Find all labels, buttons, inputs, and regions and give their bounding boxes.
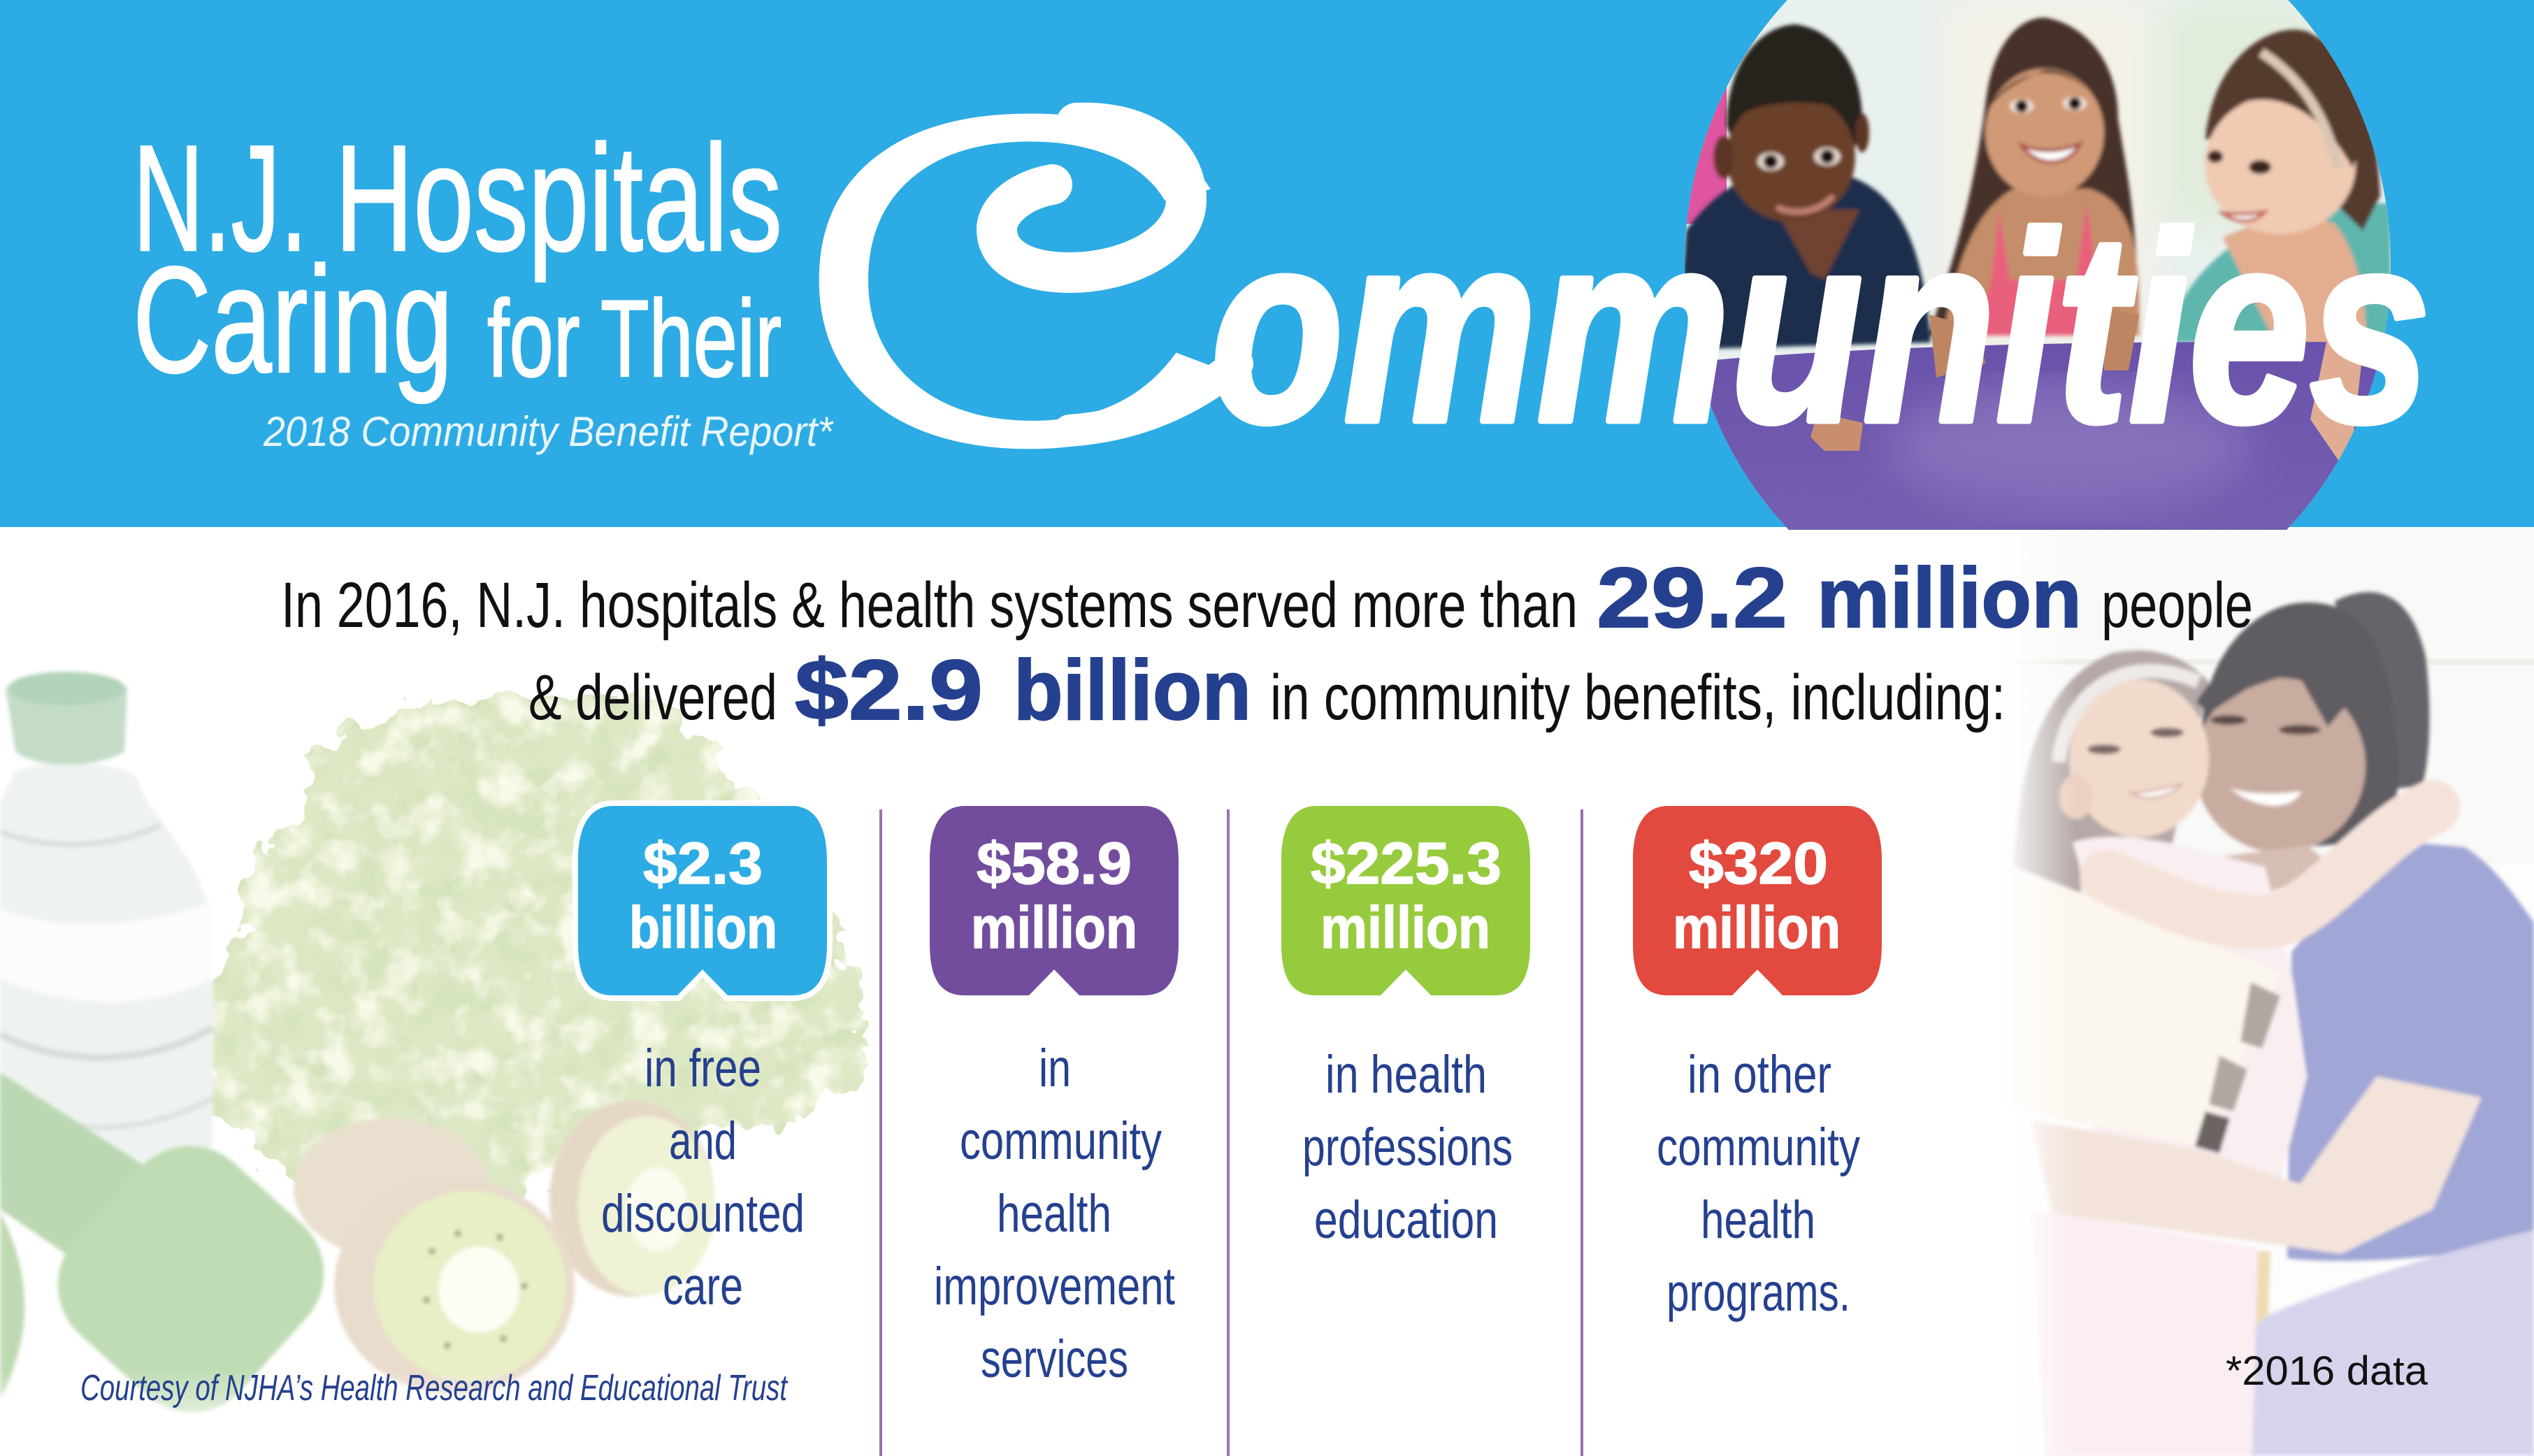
badge amount: million (1673, 895, 1841, 960)
badge amount (971, 830, 1137, 960)
badge amount (1311, 830, 1502, 960)
title script word: Communities: C (780, 8, 1247, 552)
right girl (2167, 29, 2391, 349)
title: N.J. Hospitals Caring for Their: Hospitals (335, 113, 782, 282)
description: services (981, 1329, 1128, 1389)
title: N.J. Hospitals Caring for Their: for Their (487, 278, 782, 400)
child's dress and trousers (2031, 837, 2307, 1456)
oval photo: three smiling children on a purple mat (1678, 0, 2398, 538)
headline sentence line 2: $2.9 (795, 642, 983, 737)
description (1657, 1045, 1860, 1322)
description (601, 1039, 805, 1316)
headline sentence line 2: in community benefits, including: (1270, 662, 2006, 733)
headline sentence line 1: In 2016, N.J. hospitals & health systems served more than (281, 570, 1578, 641)
stat card: $225.3 million in health professions education (1281, 806, 1530, 1250)
badge: purple (930, 806, 1179, 995)
badge amount: million (971, 895, 1137, 960)
description: care (663, 1257, 743, 1316)
badge amount: billion (629, 895, 777, 960)
decorative swash: inner spiral of the C (997, 123, 1186, 273)
description: in (1039, 1039, 1071, 1098)
description: in health (1325, 1045, 1487, 1104)
column dividers (881, 809, 1582, 1456)
badge amount: million (1320, 895, 1490, 960)
badge amount: $225.3 (1311, 830, 1502, 896)
stat card: $58.9 million in community health improvement services (930, 806, 1179, 1389)
title: N.J. Hospitals Caring for Their: N.J. (133, 113, 308, 282)
left edge fade (1999, 528, 2076, 1456)
title: N.J. Hospitals Caring for Their: Caring (133, 235, 453, 404)
lettuce (192, 689, 869, 1199)
pale wall (2006, 528, 2534, 864)
description: health (997, 1184, 1111, 1244)
manila folder (2006, 863, 2280, 1153)
description: programs. (1666, 1263, 1850, 1322)
headline sentence line 1 (281, 550, 2253, 645)
description: in free (645, 1039, 761, 1098)
subtitle: 2018 Community Benefit Report* (263, 408, 834, 455)
header banner (0, 0, 2534, 527)
child's face (2059, 671, 2209, 837)
headline sentence line 1: million (1817, 550, 2082, 645)
pink wall accent (1687, 87, 1727, 224)
stat card: $2.3 billion in free and discounted care (578, 806, 827, 1316)
description: professions (1302, 1118, 1513, 1177)
description: in other (1687, 1045, 1831, 1104)
green dumbbell (0, 1072, 351, 1440)
purple mat (1710, 342, 2377, 530)
badge: red (1633, 806, 1882, 995)
headline sentence line 2: & delivered (528, 662, 777, 733)
description: improvement (934, 1257, 1175, 1316)
child's arm around nurse (2108, 807, 2433, 922)
description: discounted (601, 1184, 805, 1244)
nurse's ponytail (2335, 592, 2429, 790)
headline sentence line 1: people (2101, 570, 2253, 641)
badge amount (629, 830, 777, 960)
wall (1678, 0, 2398, 531)
background photo: nurse hugging a child (1999, 528, 2534, 1456)
headline sentence line 2 (528, 642, 2006, 737)
title: N.J. Hospitals Caring for Their (133, 113, 782, 404)
background photo: water bottle, lettuce, dumbbell and kiwi (0, 672, 869, 1456)
description: community (960, 1111, 1162, 1171)
headline sentence line 2: billion (1014, 642, 1251, 737)
credit line: Courtesy of NJHA’s Health Research and Educational Trust (80, 1368, 789, 1408)
nurse's scrub trousers (2212, 1230, 2534, 1456)
badge amount: $320 (1689, 830, 1828, 896)
description: and (669, 1111, 737, 1171)
water bottle (0, 672, 213, 1205)
nurse's arm (2031, 1076, 2482, 1254)
boy (1678, 24, 1931, 349)
badge amount: $2.3 (643, 830, 763, 896)
soft fade at the base (0, 1370, 867, 1456)
footnote: *2016 data (2226, 1348, 2428, 1394)
badge: blue (578, 806, 827, 995)
decorative swash: tail joining the C to the o (1070, 363, 1237, 431)
child's hair (2013, 651, 2209, 898)
middle girl (1929, 17, 2139, 336)
description: community (1657, 1118, 1860, 1177)
nurse's face and hair (2195, 603, 2399, 898)
title script word: Communities (780, 8, 2431, 552)
description (1302, 1045, 1513, 1250)
description: health (1701, 1190, 1815, 1250)
headline sentence line 1: 29.2 (1597, 550, 1787, 645)
stat card: $320 million in other community health programs (1633, 806, 1882, 1322)
chair leg (2247, 1251, 2270, 1335)
badge amount (1673, 830, 1841, 960)
badge: green (1281, 806, 1530, 995)
kiwi fruits (294, 1101, 715, 1394)
nurse's scrubs top (2287, 842, 2534, 1261)
description (934, 1039, 1175, 1389)
description: education (1314, 1190, 1498, 1250)
background-coloured patch trimming the end of the C (1124, 191, 1169, 236)
children's hands and arms (1810, 308, 2366, 475)
badge amount: $58.9 (977, 830, 1132, 896)
